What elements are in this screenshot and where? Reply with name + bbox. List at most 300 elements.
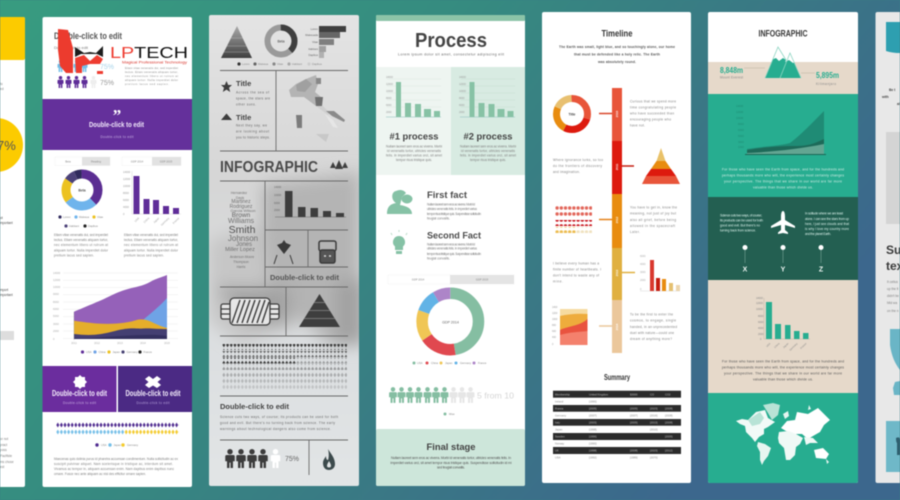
small text fragments: pract xyxy=(0,443,7,447)
word cloud: Rodriguez xyxy=(230,204,253,210)
dot rows xyxy=(56,422,179,435)
quote sub: Double-click to edit xyxy=(100,135,134,139)
fact 2 text: tempor risus tristique quis. Suspendisse sollicitudin xyxy=(427,252,481,256)
paragraph on teal: your perspective. The things that we share in our world are far more xyxy=(724,180,842,184)
summary table: [1990] xyxy=(589,400,597,404)
dot legend: Japan xyxy=(114,443,121,447)
text column left xyxy=(54,233,109,258)
icon: dropbox xyxy=(145,376,161,388)
summary table: [2016] xyxy=(650,414,658,418)
title 1 text: Across the sea of xyxy=(236,90,269,94)
grey tab xyxy=(0,331,14,340)
summary table: Membership xyxy=(555,392,570,396)
pins X Y Z: X xyxy=(743,266,748,274)
text #1 xyxy=(386,144,442,162)
red tall shape xyxy=(58,29,73,73)
panel: process template xyxy=(376,15,525,486)
text 2012: also all grief, before being xyxy=(630,218,676,222)
bar chart on beige: 6000 xyxy=(758,321,764,324)
title 2 text xyxy=(236,124,270,140)
summary table: Japan xyxy=(555,428,563,432)
donut legend: Dapibus xyxy=(88,224,99,228)
donut legend: Vitae xyxy=(97,215,104,219)
area legend: Germany xyxy=(126,350,138,354)
black roof mark xyxy=(75,46,103,57)
bar chart tabs xyxy=(122,157,181,166)
area chart xyxy=(736,104,826,154)
area legend: France xyxy=(144,350,152,354)
paragraph: warnings about technological dangers also come from science. xyxy=(220,427,331,431)
bar chart: 3000 xyxy=(640,271,646,274)
summary table: [2007] xyxy=(630,414,638,418)
logo tagline: Magical Professional Technology xyxy=(122,60,187,64)
grey legend: Vitae xyxy=(277,62,284,66)
summary table: [2005] xyxy=(630,420,638,424)
word cloud: Brown xyxy=(232,212,251,219)
process 1 panel xyxy=(376,67,451,175)
word cloud: Williams xyxy=(228,218,255,225)
text 2012: You have to get in, know the xyxy=(630,206,677,210)
timeline bar: 2014 xyxy=(615,323,619,330)
text 2010 xyxy=(630,100,676,128)
text left: turning back from science. xyxy=(720,228,756,232)
paragraph on teal: valuable than those which divide us. xyxy=(753,186,813,190)
donut legend: China xyxy=(431,361,439,365)
text 2012: meaning, not just of joy but xyxy=(630,212,676,216)
area chart xyxy=(552,306,588,346)
icon: triangle xyxy=(221,114,232,120)
donut tabs: GDP 2014 xyxy=(412,278,425,282)
dot legend: USA xyxy=(101,443,107,447)
map: Italy xyxy=(289,75,345,142)
stacked area chart: 3000 xyxy=(53,322,59,326)
timeline bar xyxy=(612,88,622,353)
word cloud: Harris xyxy=(237,265,246,269)
horizontal bars: Habitant xyxy=(308,47,318,51)
summary table: [2005] xyxy=(665,434,673,438)
text 2010: have not. xyxy=(630,124,645,128)
timeline bar: 2013 xyxy=(615,269,619,276)
bar chart tabs: GDP 2014 xyxy=(131,160,144,164)
bar chart 2: 6000 xyxy=(459,104,465,107)
summary table: [2003] xyxy=(589,420,597,424)
timeline bar: 2012 xyxy=(615,216,619,223)
paragraph fragment: up the fi xyxy=(887,287,899,291)
dot legend xyxy=(95,443,139,447)
heading: Double-click to edit xyxy=(54,31,122,41)
icon: lantern xyxy=(274,240,293,264)
stacked area chart: 2014 xyxy=(140,341,146,345)
process 2 panel xyxy=(451,67,525,175)
percent 75 blue: 75% xyxy=(100,64,114,71)
heading: Timeline xyxy=(602,28,632,38)
bar chart: 6000 xyxy=(640,255,646,258)
grey bar chart: 10000 xyxy=(274,193,282,197)
donut legend: Habitant xyxy=(69,224,79,228)
paragraph on beige xyxy=(722,360,844,382)
text column right xyxy=(124,233,179,258)
paragraph fragment: on the n xyxy=(887,309,899,313)
summary table: [2023] xyxy=(650,448,658,452)
small text fragments: ot xyxy=(0,216,3,220)
summary table: [2008] xyxy=(665,420,673,424)
donut legend xyxy=(412,361,487,365)
donut legend: Germany xyxy=(460,361,472,365)
people row blue xyxy=(58,60,88,72)
grey image box xyxy=(886,132,900,224)
teal chart band xyxy=(708,94,858,197)
small text fragments: mportant xyxy=(0,293,13,297)
text column right: aliquam tortor. Nulla imperdiet dolor xyxy=(124,248,179,252)
bar chart 1 xyxy=(386,76,441,117)
stacked area chart xyxy=(53,271,178,345)
horizontal bars xyxy=(305,26,346,58)
title 2 text: are looking about xyxy=(236,130,269,134)
grey legend: Habitant xyxy=(292,62,302,66)
bar chart on beige: 0 xyxy=(760,338,762,341)
area chart: 6000 xyxy=(738,128,744,132)
summary table: Sweden xyxy=(555,434,565,438)
text #2 xyxy=(460,144,516,162)
area legend xyxy=(81,350,152,354)
text 2013: finite number of heartbeats. I xyxy=(553,268,601,272)
stacked area chart: 0 xyxy=(53,337,55,341)
intro fragment: with xyxy=(881,95,889,99)
donut label: Beta xyxy=(78,188,86,192)
fact 1 text: tempor risus tristique quis. Suspendisse sollicitudin xyxy=(427,212,481,216)
area chart: 10000 xyxy=(736,116,744,120)
word cloud: Smith xyxy=(229,224,256,236)
bar chart on beige: 4000 xyxy=(758,327,764,330)
bar chart on beige: 14000 xyxy=(756,297,764,300)
fact 1 text xyxy=(427,202,481,220)
grey bar chart: 6000 xyxy=(274,201,280,205)
bar chart on beige xyxy=(756,297,810,352)
fact 2 text: ultricies venenatis felis. In imperdiet varius xyxy=(427,246,477,250)
paragraph on teal: perhaps thousands more who will, the experience most certainly changes xyxy=(722,174,844,178)
bar chart 1: 6000 xyxy=(386,104,392,107)
text column right: Etiam vitae venenatis dui, sed imperdiet xyxy=(124,233,178,237)
paragraph on beige: valuable than those which divide us. xyxy=(753,378,813,382)
donut chart xyxy=(66,174,98,206)
area chart: 0 xyxy=(552,343,554,346)
heading: Process xyxy=(415,30,487,52)
logo: LPTECH watermark xyxy=(58,29,188,74)
paragraph: Science cuts two ways, of course; its products can be used for both xyxy=(220,415,338,419)
heading: double-click lower: Double-click to edit xyxy=(220,402,289,411)
people legend: Mice xyxy=(449,412,455,416)
small text fragments: ed xyxy=(0,87,4,91)
donut legend xyxy=(58,215,104,228)
percent 75 purple: 75% xyxy=(100,80,114,87)
grey bar chart: 2000 xyxy=(274,208,280,212)
bar chart 1: 10000 xyxy=(386,90,394,93)
paragraph: good and evil. But there's no turning back from science. The early xyxy=(220,421,335,425)
bar chart: USA xyxy=(134,216,140,223)
bar chart: 10000 xyxy=(123,184,131,188)
summary table: [2008] xyxy=(630,448,638,452)
purple block right xyxy=(118,366,192,412)
summary table: CO xyxy=(650,392,654,396)
fact 1 text: ultricies venenatis felis. In imperdiet varius xyxy=(427,207,477,211)
logo wordmark: LP TECH xyxy=(110,45,188,62)
stacked area chart: 9000 xyxy=(53,292,59,296)
title 2 text: Next they say, we xyxy=(236,124,267,128)
footer paragraph xyxy=(54,457,178,476)
text column right: lectus. Etiam venenatis aliquam tortor, xyxy=(124,238,178,242)
intro paragraph: pretium lacus sed sapien. xyxy=(125,82,169,86)
text column left: lectus. Etiam venenatis aliquam tortor, xyxy=(54,238,108,242)
text right xyxy=(805,212,849,236)
text column left: Etiam vitae venenatis dui, sed imperdiet xyxy=(54,233,108,237)
donut tabs: GDP 2015 xyxy=(476,278,489,282)
grey bar chart: 14000 xyxy=(274,185,282,189)
small text fragments: poss xyxy=(0,448,7,452)
bar chart on beige: Germany xyxy=(789,342,799,352)
text right: here, I just see clouds and that xyxy=(805,222,849,226)
summary table: [2007] xyxy=(589,414,597,418)
bar chart on beige: Japan xyxy=(782,342,790,349)
area chart: 400 xyxy=(552,336,557,339)
summary table: Germany xyxy=(555,414,567,418)
text 2011: do the frontiers of discovery xyxy=(553,164,602,168)
text left: good and evil. But there's no xyxy=(720,224,760,228)
text 2010: Curious that we spend more xyxy=(630,100,676,104)
grey donut xyxy=(268,28,294,54)
summary table: [2008] xyxy=(665,414,673,418)
paragraph fragment: It cellus xyxy=(887,280,898,284)
stacked area chart: 2011 xyxy=(71,341,77,345)
donut legend: USA xyxy=(417,361,423,365)
stat 1: Mount Everest xyxy=(720,76,743,80)
text 2012 xyxy=(630,206,677,234)
subheading: Lorem ipsum dolor sit amet, consectetur adipiscing elit xyxy=(398,52,504,56)
bar chart: 4000 xyxy=(640,263,646,266)
bar chart 2: 10000 xyxy=(459,90,467,93)
summary table: Italy xyxy=(555,420,561,424)
bar chart 2: 14000 xyxy=(459,76,467,79)
stacked area chart: 8000 xyxy=(53,300,59,304)
text 2011: Where ignorance lurks, so too xyxy=(553,158,603,162)
text 2010: encouraging people who xyxy=(630,118,671,122)
fact 2 title: Second Fact xyxy=(427,230,481,240)
icon: backpack xyxy=(319,241,336,263)
dot grid xyxy=(555,205,592,233)
word cloud: Davis xyxy=(236,196,244,200)
text #2: Nullam laoreet sem eros ac viverra. Morbi xyxy=(460,144,516,148)
paragraph fragment: didn't be xyxy=(887,294,899,298)
grey legend: Dapibus xyxy=(312,62,323,66)
icon: trees xyxy=(330,160,348,169)
donut legend: Lorem xyxy=(63,215,71,219)
summary table: [1998] xyxy=(589,448,597,452)
bar chart on beige: 12000 xyxy=(756,302,764,305)
stacked area chart: 6000 xyxy=(53,307,59,311)
map fragment xyxy=(890,329,900,395)
summary table: [2023] xyxy=(650,406,658,410)
small text fragments: ms chose xyxy=(0,460,14,464)
bar chart: China xyxy=(142,216,151,224)
paragraph fragment: Mid wa xyxy=(887,301,897,305)
title 2 text: you to historic steps. xyxy=(236,136,270,140)
intro paragraph: nec elementum libero ut rutrum at xyxy=(125,74,178,78)
stat 2: Kilimanjaro xyxy=(816,82,836,86)
timeline bar: 2011 xyxy=(615,163,619,170)
pins X Y Z xyxy=(742,245,824,274)
small text fragments: mport xyxy=(0,288,8,292)
icon: person with speech bubble xyxy=(387,190,412,214)
grey bar chart xyxy=(274,185,346,217)
stat 1: 8,848m xyxy=(720,66,743,75)
summary table: [1996] xyxy=(589,434,597,438)
area chart: 5000 xyxy=(738,134,744,138)
icon: puzzle xyxy=(73,375,87,389)
grey legend: Malesua xyxy=(258,62,269,66)
area legend: Japan xyxy=(112,350,120,354)
pyramid chart xyxy=(221,26,252,58)
bar chart 2: 8000 xyxy=(459,97,465,100)
beige stats band xyxy=(708,62,858,94)
intro fragment: al xyxy=(897,102,900,106)
text 2014: dream of anything more? xyxy=(630,337,672,341)
summary table: [2010] xyxy=(650,428,658,432)
donut chart tabs: Reading xyxy=(91,160,102,164)
paragraph on beige: perhaps thousands more who will, the experience most certainly changes xyxy=(722,366,844,370)
stacked area chart: 2015 xyxy=(164,341,170,345)
timeline bar: 2010 xyxy=(615,110,619,117)
beige band xyxy=(708,280,858,393)
intro xyxy=(559,45,675,64)
footer paragraph: suscipit pulvinar aliquet. Nam scelerisque in tristique ac, interdum sit amet. xyxy=(54,462,173,466)
summary table: Russia xyxy=(555,406,564,410)
text 2012: allowed in the spacecraft xyxy=(630,224,675,228)
final text: Nullam laoreet sem eros ac viverra. Morbi id venenatis tortor, ultricies venenatis felis. In xyxy=(391,456,511,460)
text 2011: and imagination. xyxy=(553,170,580,174)
bar chart: 2000 xyxy=(640,279,646,282)
text #1: tempor risus tristique quis. xyxy=(396,158,432,162)
panel: timeline template xyxy=(542,12,691,483)
bar chart on beige: 2000 xyxy=(758,333,764,336)
summary table: CO2 xyxy=(665,392,671,396)
summary table: Norway xyxy=(555,442,565,446)
final stage panel xyxy=(376,429,525,486)
block heading: Double-click to edit xyxy=(52,389,107,398)
summary table: Ireland xyxy=(555,400,564,404)
paragraph on beige: your perspective. The things that we share in our world are far more xyxy=(724,372,842,376)
area legend: China xyxy=(98,350,106,354)
intro: that must be defended like a holy relic. The Earth xyxy=(574,52,660,56)
area chart: 3000 xyxy=(738,140,744,144)
word cloud: Garcia Wilson xyxy=(231,208,255,213)
intro paragraph: Etiam vitae venenatis dui, sed imperdiet xyxy=(125,66,178,70)
title 1 text xyxy=(236,90,270,106)
area chart: 600 xyxy=(552,330,557,333)
donut label: Beta xyxy=(278,40,285,44)
paragraph fragment xyxy=(887,280,899,313)
summary table: [2005] xyxy=(589,406,597,410)
blue box icon xyxy=(896,437,900,455)
donut chart xyxy=(422,293,478,350)
teal map band xyxy=(708,393,858,483)
stat 2: 5,895m xyxy=(816,71,839,80)
paragraph on teal xyxy=(722,168,844,190)
donut label: Title xyxy=(569,112,576,116)
word cloud xyxy=(225,191,258,269)
intro fragment: Be t xyxy=(889,88,896,92)
bar chart 1: 12000 xyxy=(386,83,394,86)
stacked area chart: 14000 xyxy=(53,271,61,275)
bar chart 1: 14000 xyxy=(386,76,394,79)
people legend xyxy=(444,412,455,416)
word cloud: Miller Lopez xyxy=(225,247,255,253)
footer paragraph: ornare. Fusce nec ante aliquam ac nisi des efficitur ornare sapien. xyxy=(54,472,146,476)
footer paragraph: Vivamus ac tempor in, aliquam accumsan enim. Nam dapibus enim dapibus nunc xyxy=(54,467,174,471)
intro paragraph: lectus. Etiam venenatis aliquam tortor, xyxy=(125,70,178,74)
small text fragments: or not xyxy=(0,437,8,441)
area chart: 8000 xyxy=(738,122,744,126)
text #1: felis. In imperdiet varius orci, sit amet xyxy=(386,154,442,158)
word cloud: Hernandez xyxy=(231,191,247,195)
stacked area chart: 12000 xyxy=(53,278,61,282)
stacked area chart: 2012 xyxy=(94,341,100,345)
icon: flame xyxy=(323,449,335,470)
icon: star xyxy=(221,81,232,92)
stat 2 xyxy=(801,71,839,86)
area legend: USA xyxy=(86,350,92,354)
bar chart 1: 2000 xyxy=(386,111,392,114)
area chart: 14000 xyxy=(736,104,744,108)
block heading: Double-click to edit xyxy=(126,389,181,398)
summary table: [2008] xyxy=(665,406,673,410)
title 1 text: other suns. xyxy=(236,102,256,106)
purple quote band xyxy=(42,99,192,150)
small text fragments xyxy=(0,82,14,469)
summary table: [2013] xyxy=(650,420,658,424)
text 2013: don't intend to waste any of xyxy=(553,274,599,278)
dot legend: Germany xyxy=(127,443,139,447)
paragraph xyxy=(220,415,338,431)
stacked area chart: 10000 xyxy=(53,285,61,289)
donut chart tabs xyxy=(55,157,110,166)
pins X Y Z: Y xyxy=(781,266,786,274)
small text fragments: mportant xyxy=(0,221,13,225)
yellow circle percentage xyxy=(0,118,23,172)
final heading: Final stage xyxy=(426,442,476,452)
dot matrix xyxy=(222,344,347,390)
summary table: [2012] xyxy=(665,448,673,452)
dark band xyxy=(708,197,858,280)
text 2014: duel with nature—could one xyxy=(630,331,674,335)
word cloud: Martinez xyxy=(231,199,251,205)
people row purple xyxy=(58,76,96,88)
summary table: [1990] xyxy=(589,442,597,446)
bar chart on beige: 10000 xyxy=(756,308,764,311)
fact 2 text: Nullam laoreet sem eros ac viverra. Morbi id xyxy=(427,242,475,246)
text right: In solitude where we are least xyxy=(805,212,843,216)
bar chart on beige: France xyxy=(800,342,808,350)
intro fragment xyxy=(881,88,900,106)
intro: The Earth was small, light blue, and so touchingly alone, our home xyxy=(559,45,675,49)
summary table: [2005] xyxy=(630,406,638,410)
paragraph on beige: For those who have seen the Earth from space, and for the hundreds and xyxy=(722,360,844,364)
heading #2: #2 process xyxy=(464,132,512,142)
horizontal bars: Lorem xyxy=(311,27,318,31)
red wave xyxy=(75,55,103,73)
pyramid xyxy=(642,148,680,184)
summary table: [1989] xyxy=(630,456,638,460)
quote heading: Double-click to edit xyxy=(89,122,145,129)
small text fragments: to xyxy=(0,82,3,86)
